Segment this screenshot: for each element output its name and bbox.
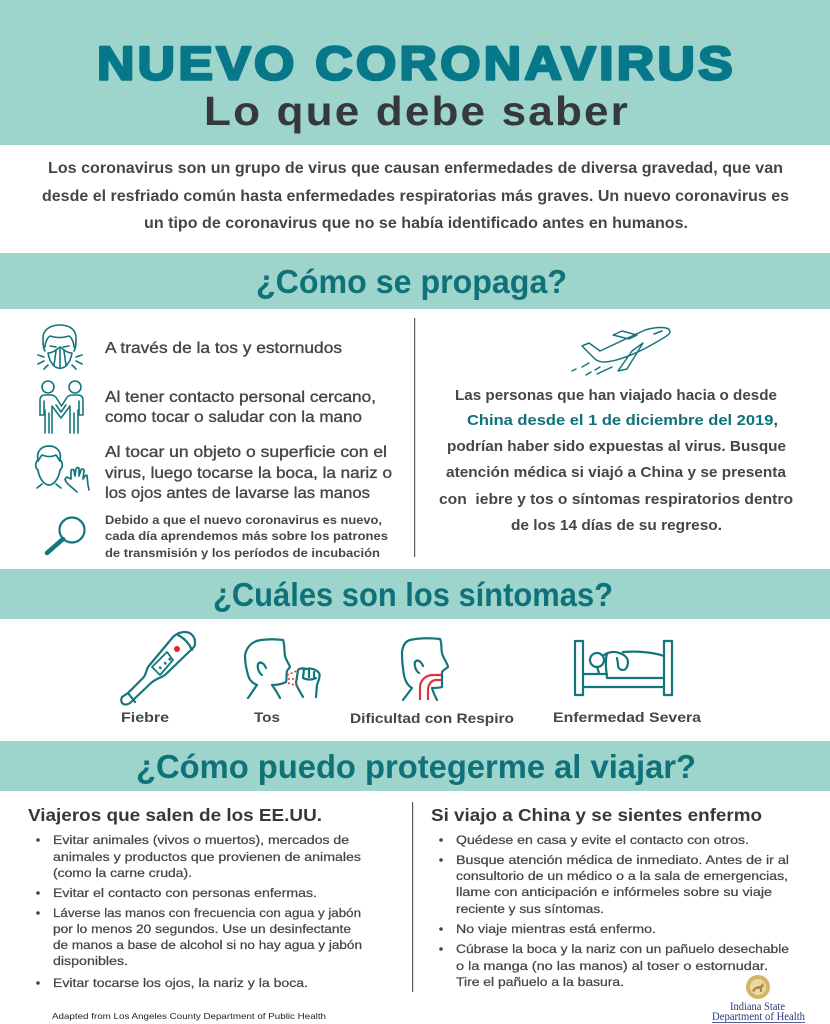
subheading: travelers leaving: Viajeros que salen de los EE.UU. [28,805,322,825]
text: close personal contact [105,389,376,426]
label: cough: Tos [254,709,280,725]
text: still learning: de transmisión y los períodos de incubación [105,546,380,560]
panel: spread routes [36,325,392,560]
panel: travelers leaving the US [28,805,362,990]
panel: traveling to China and sick [431,805,789,989]
text: touching a surface: Al tocar un objeto o superficie con el [105,444,387,461]
logo: Indiana State Department of Health: Department of Health [712,1009,805,1023]
icon: face and hand [36,446,89,492]
text: travel advice: China desde el 1 de diciembre del 2019 , [467,413,778,429]
list: if sick: llame con anticipación e infórmeles sobre su viaje [456,885,772,899]
section band: how it spreads [0,253,830,309]
text: coughing and sneezing: A través de la tos y estornudos [105,340,342,357]
section band: protection [0,741,830,791]
heading: protection: ¿Cómo puedo protegerme al viajar? [136,748,696,785]
icon: person coughing [245,639,320,698]
heading: symptoms: ¿Cuáles son los síntomas? [213,576,613,613]
icon: sneezing face with mask [38,325,82,369]
list: travelers leaving: (como la carne cruda). [53,866,192,880]
intro paragraph [42,160,789,232]
list: if sick [439,833,789,989]
text: travel advice [439,388,793,534]
text: still learning [105,513,388,560]
icon: red airway [420,675,441,700]
intro paragraph: desde el resfriado común hasta enfermedades respiratorias más graves. Un nuevo coronavirus es [42,188,789,205]
text: touching a surface: virus, luego tocarse la boca, la nariz o [105,465,392,482]
list: if sick: No viaje mientras está enfermo. [456,922,656,936]
intro paragraph: un tipo de coronavirus que no se había identificado antes en humanos. [144,215,688,232]
list: travelers leaving: Evitar animales (vivos o muertos), mercados de [53,833,349,847]
list: travelers leaving: Evitar el contacto con personas enfermas. [53,886,317,900]
list: if sick: consultorio de un médico o a la sala de emergencias, [456,869,788,883]
list: travelers leaving: disponibles. [53,954,128,968]
text: travel advice: Las personas que han viajado hacia o desde [455,388,777,404]
list: travelers leaving [36,833,362,990]
header band [0,0,830,145]
icon: state seal [746,975,770,999]
title: NUEVO CORONAVIRUS [97,36,736,90]
text: touching a surface [105,444,392,502]
label: fever: Fiebre [121,709,169,725]
icon: thermometer [121,632,195,704]
subtitle: Lo que debe saber [204,88,630,134]
list: if sick: Tire el pañuelo a la basura. [456,975,624,989]
list: travelers leaving: animales y productos que provienen de animales [53,850,361,864]
label: difficulty breathing: Dificultad con Respiro [350,710,514,726]
text: touching a surface: los ojos antes de lavarse las manos [105,485,370,502]
panel: travel notice [439,328,793,534]
text: travel advice: atención médica si viajó a China y se presenta [446,465,787,481]
icon: magnifying glass [47,518,84,553]
text: travel advice: con iebre y tos o síntomas respiratorios dentro [439,492,793,508]
subheading: if sick: Si viajo a China y se sientes enfermo [431,805,762,825]
intro paragraph: Los coronavirus son un grupo de virus que causan enfermedades de diversa gravedad, que van [48,160,783,177]
list: travelers leaving: por lo menos 20 segundos. Use un desinfectante [53,922,351,936]
text: close personal contact: como tocar o saludar con la mano [105,409,362,426]
divider [414,318,415,557]
text: travel advice: podrían haber sido expuestas al virus. Busque [447,439,786,455]
logo: Indiana State Department of Health: Indiana State [730,999,785,1013]
icon: cough droplets [287,670,299,686]
icon: thermometer reading [174,646,180,652]
divider [412,802,413,992]
text: still learning: cada día aprendemos más sobre los patrones [105,529,388,543]
list: if sick: Busque atención médica de inmediato. Antes de ir al [456,853,789,867]
label: severe illness: Enfermedad Severa [553,709,701,725]
icon: person in bed [575,641,672,695]
text: still learning: Debido a que el nuevo coronavirus es nuevo, [105,513,382,527]
list: if sick: reciente y sus síntomas. [456,902,604,916]
section band: symptoms [0,569,830,619]
text: close personal contact: Al tener contacto personal cercano, [105,389,376,406]
list: travelers leaving: Láverse las manos con frecuencia con agua y jabón [53,906,361,920]
list: if sick: Quédese en casa y evite el contacto con otros. [456,833,749,847]
text: travel advice: de los 14 días de su regreso. [511,518,722,534]
icon: airplane [572,328,670,375]
icon: person with breathing difficulty [402,638,448,700]
source credit: Adapted from Los Angeles County Department of Public Health [52,1011,326,1021]
heading: spread: ¿Cómo se propaga? [256,263,567,300]
list: if sick: o la manga (no las manos) al toser o estornudar. [456,959,768,973]
logo: Indiana State Department of Health [712,975,805,1023]
list: travelers leaving: de manos a base de alcohol si no hay agua y jabón [53,938,362,952]
panel: symptoms [121,632,701,726]
list: if sick: Cúbrase la boca y la nariz con un pañuelo desechable [456,942,789,956]
icon: two people holding hands [40,381,83,433]
list: travelers leaving: Evitar tocarse los ojos, la nariz y la boca. [53,976,308,990]
